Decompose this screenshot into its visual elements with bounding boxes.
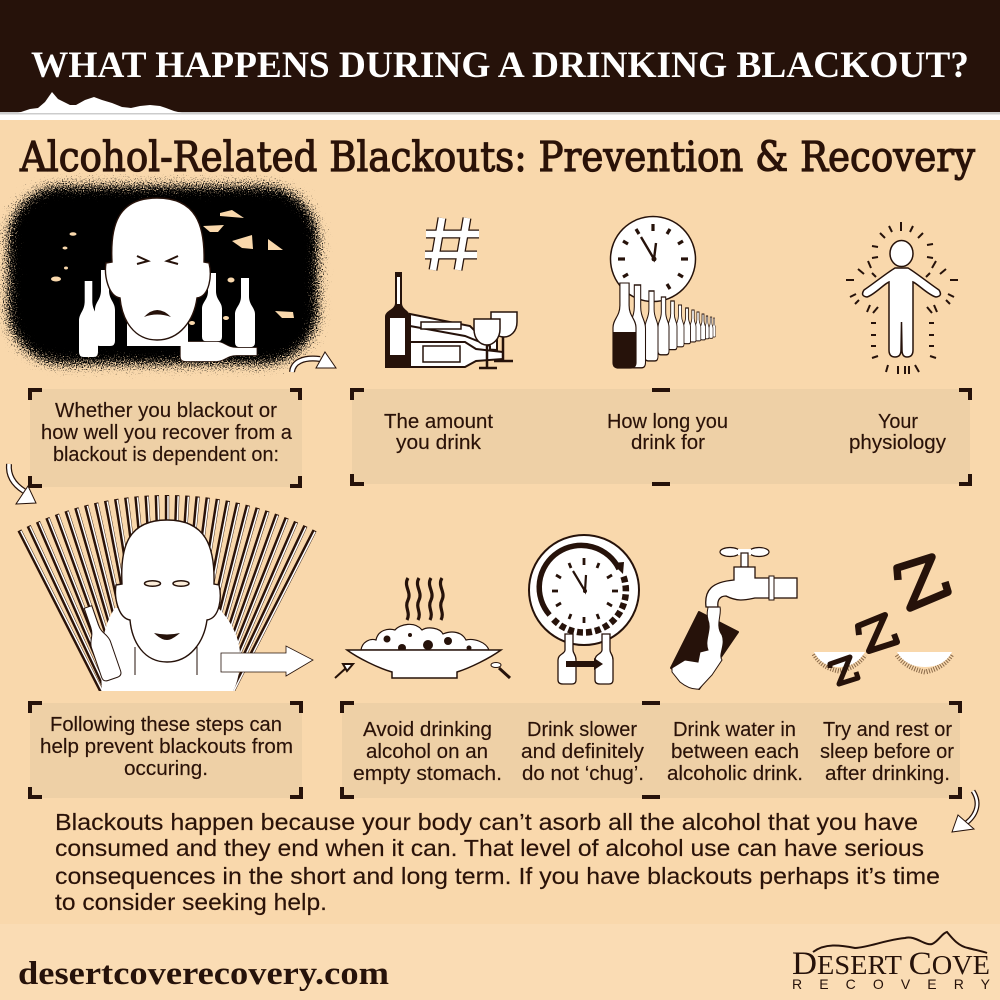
panel: blackout intro: how well you recover from a <box>41 422 293 444</box>
icon: amount, hash with wine bottles and glasses <box>385 218 517 368</box>
panel: four steps: Drink slower <box>527 719 637 741</box>
panel: four steps: sleep before or <box>820 741 954 763</box>
panel: four steps: do not ‘chug’. <box>522 763 644 785</box>
panel: four steps: Try and rest or <box>823 719 952 741</box>
icon: closed eyes and sleep marks <box>814 557 952 684</box>
website url: desertcoverecovery.com <box>18 956 389 992</box>
header banner: WHAT HAPPENS DURING A DRINKING BLACKOUT? <box>31 45 969 86</box>
arrow: right <box>221 646 313 676</box>
text block: explanation: consumed and they end when it can. That level of alcohol use can have serious <box>55 835 924 861</box>
illustration: recovering head with radiating lines <box>18 495 316 691</box>
illustration: blacked-out head with bottles <box>8 186 318 364</box>
text block: explanation: Blackouts happen because your body can’t asorb all the alcohol that you have <box>55 809 918 835</box>
panel: four steps <box>342 703 960 798</box>
panel: three factors: The amount <box>384 411 493 433</box>
bottle in hand <box>79 604 122 682</box>
text block: explanation: consequences in the short and long term. If you have blackouts perhaps it’s time <box>55 863 940 889</box>
panel: prevention intro <box>30 703 302 798</box>
panel: blackout intro <box>30 389 302 487</box>
head <box>116 520 220 662</box>
text block: explanation <box>55 809 940 915</box>
panel: blackout intro: blackout is dependent on: <box>53 444 279 466</box>
panel: four steps: after drinking. <box>825 763 950 785</box>
panel: prevention intro: Following these steps can <box>50 714 282 736</box>
panel: four steps: and definitely <box>521 741 644 763</box>
header banner <box>0 0 1000 120</box>
panel: three factors: physiology <box>849 432 946 454</box>
panel: four steps: empty stomach. <box>353 763 502 785</box>
panel: four steps: between each <box>671 741 799 763</box>
footer band <box>0 924 1000 1000</box>
shoulders <box>101 605 240 691</box>
radiating lines <box>18 495 316 691</box>
icon: physiology, glowing person <box>846 222 958 374</box>
panel: three factors <box>352 389 970 484</box>
head <box>106 198 210 346</box>
panel: three factors: How long you <box>607 411 728 433</box>
logo: Desert Cove Recovery: RECOVERY <box>792 976 991 992</box>
panel: prevention intro: help prevent blackouts from <box>40 736 293 758</box>
arrow: down to second row <box>9 464 36 504</box>
arrow: down to paragraph <box>952 791 977 832</box>
panel: three factors: you drink <box>396 432 482 454</box>
panel: prevention intro: occuring. <box>124 758 208 780</box>
bottle silhouettes <box>79 270 257 362</box>
icon: food bowl <box>335 578 510 678</box>
panel: four steps: alcoholic drink. <box>667 763 803 785</box>
logo: Desert Cove Recovery: DESERT COVE <box>792 946 990 982</box>
icon: tap and bottle <box>671 548 797 689</box>
text block: explanation: to consider seeking help. <box>55 889 327 915</box>
logo: Desert Cove Recovery <box>792 932 991 992</box>
arrow: to factors <box>292 352 336 372</box>
icon: duration, clock and row of bottles <box>610 216 716 368</box>
panel: four steps: Avoid drinking <box>363 719 492 741</box>
panel: blackout intro: Whether you blackout or <box>55 400 277 422</box>
panel: four steps: alcohol on an <box>366 741 488 763</box>
panel: three factors: drink for <box>631 432 705 454</box>
icon: slow clock <box>529 535 639 684</box>
panel: four steps: Drink water in <box>673 719 796 741</box>
panel: three factors: Your <box>878 411 918 433</box>
